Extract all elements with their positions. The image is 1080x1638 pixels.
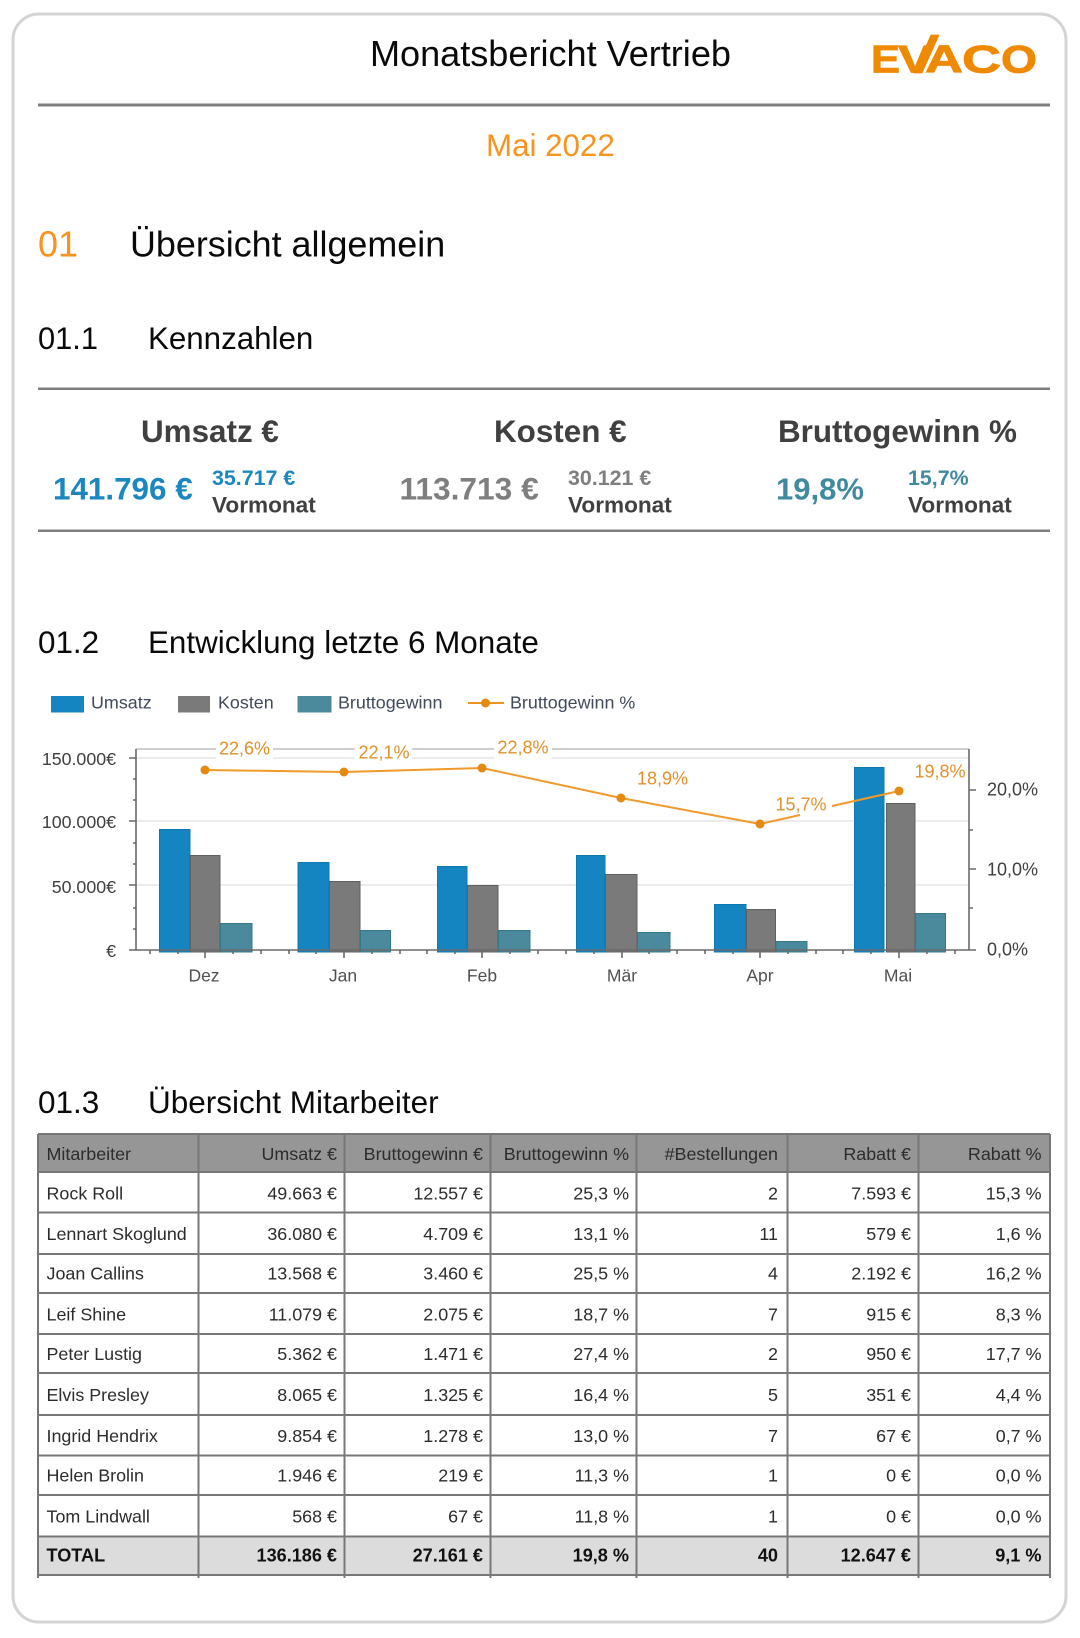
heading: section 01: 01 (38, 224, 78, 264)
panel: KPI Kosten (400, 414, 672, 518)
table rows: 8.065 € (277, 1385, 337, 1405)
table rows: 15,3 % (986, 1183, 1042, 1203)
heading: section 01.3: 01.3 (38, 1084, 99, 1120)
table rows: Lennart Skoglund (46, 1224, 187, 1244)
month labels (188, 966, 912, 986)
heading: section 01: Übersicht allgemein (130, 224, 445, 264)
month labels: Feb (467, 966, 497, 986)
table rows: Joan Callins (46, 1263, 144, 1283)
table rows: 2.192 € (851, 1263, 911, 1283)
table rows: Elvis Presley (46, 1385, 149, 1405)
table rows: 0,7 % (996, 1426, 1042, 1446)
left axis labels: 150.000€ (42, 749, 116, 769)
table rows: 0,0 % (996, 1506, 1042, 1526)
table total row: TOTAL (46, 1546, 105, 1566)
table header: Umsatz € (261, 1144, 337, 1164)
table rows: 1.946 € (277, 1466, 337, 1486)
table rows: 351 € (866, 1385, 911, 1405)
panel: KPI Bruttogewinn: 15,7% (908, 466, 969, 490)
panel: KPI Bruttogewinn: Vormonat (908, 492, 1012, 518)
table rows: 1,6 % (996, 1224, 1042, 1244)
table rows: 49.663 € (267, 1183, 337, 1203)
table rows: 219 € (438, 1466, 483, 1486)
table header: Bruttogewinn € (364, 1144, 483, 1164)
right axis labels (987, 780, 1038, 960)
table total row: 40 (758, 1546, 778, 1566)
combo chart: Umsatz, Kosten, Bruttogewinn and Bruttogewinn %: 15,7% (775, 794, 827, 814)
table rows: 13,1 % (573, 1224, 629, 1244)
table rows: 2 (768, 1344, 778, 1364)
table rows: 13.568 € (267, 1263, 337, 1283)
bars: Umsatz (160, 768, 884, 952)
table rows: Leif Shine (46, 1305, 126, 1325)
table rows: 7.593 € (851, 1183, 911, 1203)
icon: EVACO logo: A (925, 38, 963, 82)
table rows: 25,5 % (573, 1263, 629, 1283)
combo chart: Umsatz, Kosten, Bruttogewinn and Bruttogewinn %: 19,8% (914, 762, 966, 782)
right axis labels: 0,0% (987, 940, 1028, 960)
table rows: 4,4 % (996, 1385, 1042, 1405)
combo chart: Umsatz, Kosten, Bruttogewinn and Bruttogewinn %: 22,6% (219, 738, 270, 758)
panel: KPI Bruttogewinn (776, 414, 1017, 518)
icon: EVACO logo: V (898, 38, 932, 82)
left axis labels: € (106, 941, 116, 961)
table rows: 16,2 % (986, 1263, 1042, 1283)
left axis labels: 100.000€ (42, 812, 116, 832)
table rows: 13,0 % (573, 1426, 629, 1446)
table rows: 1.471 € (423, 1344, 483, 1364)
right axis labels: 10,0% (987, 860, 1038, 880)
table rows: 11 (759, 1224, 778, 1244)
table rows: 9.854 € (277, 1426, 337, 1446)
table rows: 16,4 % (573, 1385, 629, 1405)
bars: Bruttogewinn (220, 914, 946, 952)
table header: #Bestellungen (665, 1144, 778, 1164)
chart legend (51, 692, 635, 712)
month labels: Apr (746, 966, 774, 986)
table rows: 8,3 % (996, 1305, 1042, 1325)
table total row: 19,8 % (573, 1546, 629, 1566)
left axis labels: 50.000€ (52, 877, 116, 897)
panel: KPI Kosten: 113.713 € (400, 470, 539, 506)
table rows: 1 (768, 1466, 778, 1486)
heading: section 01.2: Entwicklung letzte 6 Monate (148, 625, 539, 660)
table header: Bruttogewinn % (504, 1144, 629, 1164)
title: Monatsbericht Vertrieb (370, 33, 731, 74)
table header: Rabatt % (968, 1144, 1042, 1164)
table rows: 17,7 % (986, 1344, 1042, 1364)
chart legend: Kosten (218, 692, 274, 712)
line: Bruttogewinn % (205, 768, 760, 824)
table total row: 136.186 € (256, 1546, 337, 1566)
icon: EVACO logo (871, 35, 1037, 82)
panel: KPI Umsatz: 141.796 € (53, 472, 193, 506)
table rows: 1.325 € (423, 1385, 483, 1405)
panel: KPI Umsatz (53, 414, 316, 518)
table rows: 36.080 € (267, 1224, 337, 1244)
data labels (216, 737, 552, 766)
table rows: 7 (768, 1305, 778, 1325)
panel: KPI Umsatz: Umsatz € (141, 414, 279, 449)
table rows: 2.075 € (423, 1305, 483, 1325)
table total row (46, 1546, 1042, 1566)
table rows: 27,4 % (573, 1344, 629, 1364)
icon: EVACO logo: O (1001, 38, 1037, 82)
left axis labels (42, 749, 116, 961)
table rows: 0,0 % (996, 1466, 1042, 1486)
heading: section 01.3: Übersicht Mitarbeiter (148, 1084, 439, 1120)
table rows: 25,3 % (573, 1183, 629, 1203)
table rows: 12.557 € (413, 1183, 483, 1203)
combo chart: Umsatz, Kosten, Bruttogewinn and Bruttogewinn %: 18,9% (637, 768, 688, 788)
table rows: 4.709 € (423, 1224, 483, 1244)
table rows: 568 € (292, 1506, 337, 1526)
table total row: 27.161 € (413, 1546, 483, 1566)
month labels: Jan (329, 966, 357, 986)
right axis labels: 20,0% (987, 780, 1038, 800)
table rows: 3.460 € (423, 1263, 483, 1283)
date subtitle: Mai 2022 (486, 128, 615, 163)
chart legend: Bruttogewinn (338, 692, 442, 712)
heading: section 01.2: 01.2 (38, 625, 99, 660)
combo chart: Umsatz, Kosten, Bruttogewinn and Bruttogewinn % (42, 737, 1038, 986)
month labels: Mai (884, 966, 912, 986)
table rows: 67 € (876, 1426, 911, 1446)
combo chart: Umsatz, Kosten, Bruttogewinn and Bruttogewinn %: 22,8% (497, 738, 549, 758)
icon: EVACO logo: C (962, 38, 1001, 82)
table rows: 1.278 € (423, 1426, 483, 1446)
panel: KPI Umsatz: Vormonat (212, 492, 316, 518)
panel: KPI Kosten: Vormonat (568, 492, 672, 518)
table rows: 4 (768, 1263, 778, 1283)
bars: Kosten (190, 804, 915, 952)
chart legend: Bruttogewinn % (510, 692, 635, 712)
panel: KPI Bruttogewinn: 19,8% (776, 472, 864, 506)
table total row: 12.647 € (841, 1546, 911, 1566)
table rows: Ingrid Hendrix (46, 1426, 158, 1446)
table rows: 11,3 % (575, 1466, 629, 1486)
table rows (46, 1183, 1042, 1526)
chart legend: Umsatz (91, 692, 152, 712)
table rows: Tom Lindwall (46, 1506, 150, 1526)
table rows: 2 (768, 1183, 778, 1203)
table rows: 0 € (886, 1466, 911, 1486)
month labels: Mär (607, 966, 637, 986)
month labels: Dez (188, 966, 220, 986)
table rows: 7 (768, 1426, 778, 1446)
table rows: 11.079 € (269, 1305, 337, 1325)
table rows: 915 € (866, 1305, 911, 1325)
table rows: 5 (768, 1385, 778, 1405)
table rows: 11,8 % (575, 1506, 629, 1526)
heading: section 01.1: 01.1 (38, 321, 98, 356)
table header: Mitarbeiter (46, 1144, 131, 1164)
table rows: Peter Lustig (46, 1344, 142, 1364)
heading: section 01.1 (38, 321, 313, 356)
table rows: 1 (768, 1506, 778, 1526)
table rows: 579 € (866, 1224, 911, 1244)
heading: section 01.1: Kennzahlen (148, 321, 313, 356)
table rows: 0 € (886, 1506, 911, 1526)
panel: KPI Bruttogewinn: Bruttogewinn % (778, 414, 1017, 449)
panel: KPI Umsatz: 35.717 € (212, 466, 295, 490)
table: Mitarbeiter (38, 1134, 1050, 1578)
table rows: 18,7 % (573, 1305, 629, 1325)
table rows: Rock Roll (46, 1183, 123, 1203)
panel: KPI Kosten: 30.121 € (568, 466, 651, 490)
table header: Rabatt € (843, 1144, 911, 1164)
table rows: 5.362 € (277, 1344, 337, 1364)
axes (129, 749, 976, 958)
table rows: 950 € (866, 1344, 911, 1364)
table rows: Helen Brolin (46, 1466, 144, 1486)
table header (46, 1144, 1042, 1164)
table rows: 67 € (448, 1506, 483, 1526)
combo chart: Umsatz, Kosten, Bruttogewinn and Bruttogewinn %: 22,1% (358, 742, 410, 762)
panel: KPI Kosten: Kosten € (494, 414, 627, 449)
table total row: 9,1 % (995, 1546, 1042, 1566)
icon: EVACO logo: E (871, 38, 900, 82)
